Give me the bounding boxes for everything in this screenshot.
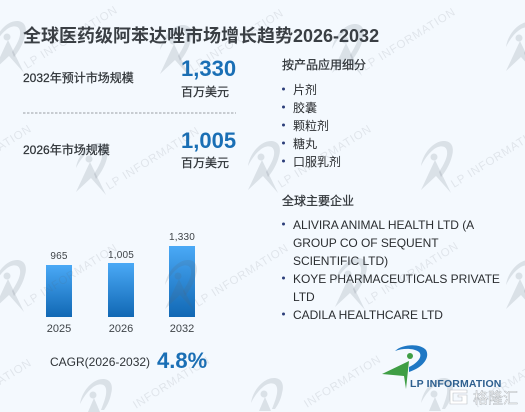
CAGR callout bbox=[50, 348, 207, 373]
bar: 2025 bbox=[46, 251, 72, 335]
watermark: Gelonghui bbox=[450, 390, 518, 407]
stat: 2032 market size bbox=[23, 56, 236, 99]
stat: 2026 market size: 1,005 bbox=[181, 128, 236, 153]
panel: key companies bbox=[282, 193, 500, 322]
stat: 2026 market size: 2026年市场规模 bbox=[23, 142, 110, 157]
stat: 2026 market size bbox=[23, 128, 236, 170]
bar: 2026: 2026 bbox=[109, 323, 133, 335]
company list: GROUP CO OF SEQUENT bbox=[293, 236, 439, 250]
watermark pattern: INFORMATION bbox=[302, 353, 384, 411]
company list: KOYE PHARMACEUTICALS PRIVATE bbox=[293, 272, 500, 286]
logo: LP Information: LP INFORMATION bbox=[410, 378, 502, 390]
heading: companies: 全球主要企业 bbox=[282, 193, 354, 208]
bar: 2025: 2025 bbox=[47, 323, 71, 335]
company list: SCIENTIFIC LTD) bbox=[293, 254, 388, 268]
logo: LP Information bbox=[382, 345, 502, 390]
bar: 2026: 1,005 bbox=[108, 250, 134, 261]
company list: CADILA HEALTHCARE LTD bbox=[293, 308, 443, 322]
watermark pattern: LP INFORMATION bbox=[22, 4, 120, 72]
segment list: 糖丸 bbox=[293, 136, 317, 151]
segment list bbox=[282, 82, 341, 169]
bar: 2025: 965 bbox=[50, 251, 68, 262]
watermark: Gelonghui: 格隆汇 bbox=[473, 390, 518, 407]
watermark pattern: LP INFORMATION bbox=[276, 123, 374, 191]
bar: 2032 bbox=[169, 232, 195, 335]
watermark pattern: LP INFORMATION bbox=[104, 125, 202, 193]
watermark pattern: LP INFORMATION bbox=[193, 242, 291, 310]
bar chart bbox=[46, 232, 195, 335]
company list bbox=[282, 218, 500, 322]
CAGR callout: CAGR(2026-2032) bbox=[50, 355, 150, 369]
stat: 2032 market size: 2032年预计市场规模 bbox=[23, 70, 134, 85]
CAGR callout: 4.8% bbox=[157, 348, 207, 373]
panel: product segments bbox=[282, 57, 366, 169]
segment list: 口服乳剂 bbox=[293, 154, 341, 169]
title: 全球医药级阿苯达唑市场增长趋势2026-2032 bbox=[23, 25, 379, 46]
bar: 2032: 2032 bbox=[170, 323, 194, 335]
segment list: 片剂 bbox=[293, 82, 317, 97]
stat: 2026 market size: 百万美元 bbox=[181, 156, 229, 170]
watermark pattern: LP INFORMATION bbox=[188, 7, 286, 75]
segment list: 胶囊 bbox=[293, 100, 317, 115]
stat: 2032 market size: 1,330 bbox=[181, 56, 236, 81]
watermark pattern: INFORMATION bbox=[131, 354, 213, 412]
stat: 2032 market size: 百万美元 bbox=[181, 85, 229, 99]
bar: 2032: 1,330 bbox=[169, 232, 195, 243]
watermark pattern: LP INFORMATION bbox=[360, 6, 458, 74]
company list: ALIVIRA ANIMAL HEALTH LTD (A bbox=[293, 218, 474, 232]
watermark pattern: LP INFORMATION bbox=[363, 240, 461, 308]
segment list: 颗粒剂 bbox=[293, 118, 329, 133]
heading: segments: 按产品应用细分 bbox=[282, 57, 366, 72]
bar: 2026 bbox=[108, 250, 134, 335]
company list: LTD bbox=[293, 290, 315, 304]
watermark pattern: LP INFORMATION bbox=[22, 242, 120, 310]
